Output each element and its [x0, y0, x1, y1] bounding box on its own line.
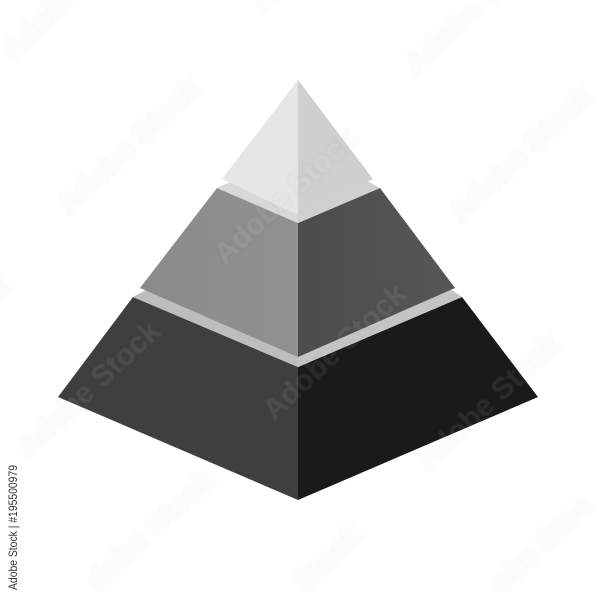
- tier: middle: [140, 188, 455, 357]
- stock watermark pattern: Adobe Stock: [410, 327, 567, 477]
- stock watermark pattern: Adobe Stock: [256, 277, 413, 427]
- image id caption: Adobe Stock | #195500979: [6, 465, 20, 590]
- stock watermark pattern: dobe Stock: [80, 463, 221, 597]
- ledge: between base and middle tiers: [133, 289, 462, 367]
- stock watermark pattern: Adobe Stock: [51, 71, 208, 221]
- tier: base: [58, 297, 538, 500]
- stock watermark pattern: obe Stoc: [484, 489, 599, 599]
- tier: top: [222, 80, 373, 215]
- stock watermark pattern: Adobe Stock: [443, 79, 600, 229]
- stock watermark pattern: Adobe Stock: [207, 121, 364, 271]
- pyramid: [58, 80, 538, 500]
- stock watermark pattern: Adobe Stock: [10, 314, 167, 464]
- stock watermark pattern: Stock: [287, 518, 370, 598]
- ledge: between middle and top tiers: [217, 181, 380, 223]
